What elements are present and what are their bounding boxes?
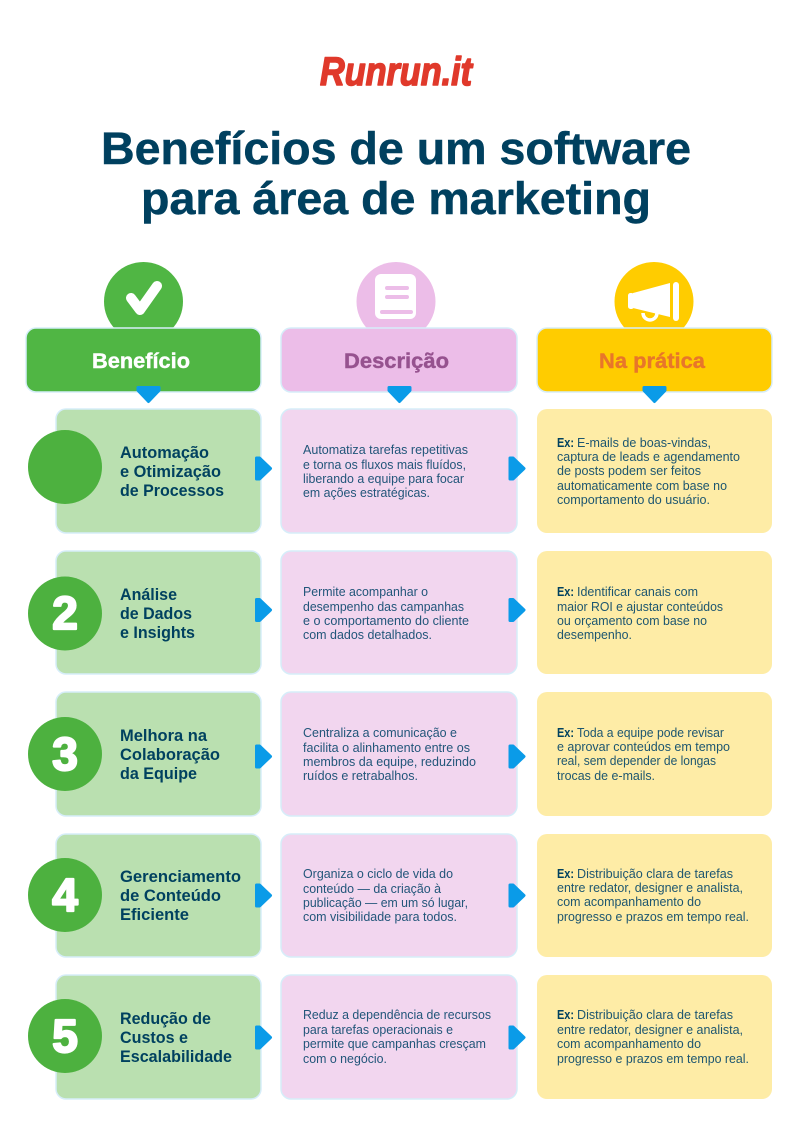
icon: document [356,262,436,341]
panel: example 1: de posts podem ser feitos [557,464,701,478]
column header: Benefício: Benefício [92,350,190,373]
panel: benefit 4: 4 [52,869,78,921]
panel: benefit 3: 3 [52,728,78,780]
panel: benefit 1: Automação [120,444,209,462]
panel: example 5: Distribuição clara de tarefas [577,1008,733,1022]
panel: example 4 [537,834,772,957]
panel: example 2: Identificar canais com [577,585,698,599]
panel: benefit 3: da Equipe [120,765,197,783]
panel: description 5: Reduz a dependência de recursos [303,1008,491,1022]
panel: example 3: trocas de e-mails. [557,769,655,783]
row 4 [28,834,772,957]
arrow: down, column 2 [389,388,410,402]
arrow: down, column 1 [138,388,159,402]
panel: description 4: publicação — em um só lugar, [303,896,468,910]
arrow: right [256,458,270,479]
panel: example 5 [537,975,772,1099]
panel: example 5: progresso e prazos em tempo real. [557,1052,749,1066]
column header: Descrição: Descrição [344,350,449,373]
panel: description 2: desempenho das campanhas [303,600,464,614]
panel: description 3: facilita o alinhamento entre os [303,741,470,755]
panel: example 5: Ex: [557,1008,574,1022]
panel: description 5 [281,975,517,1099]
panel: benefit 3: Melhora na [120,727,208,745]
arrow: right [256,885,270,906]
column header: Na prática: Na prática [599,350,705,373]
panel: description 1: e torna os fluxos mais fluídos, [303,458,466,472]
panel: example 1 [537,409,772,533]
panel: description 5: com o negócio. [303,1052,387,1066]
panel: example 4: com acompanhamento do [557,895,701,909]
panel: benefit 5: Escalabilidade [120,1048,232,1066]
panel: description 2: Permite acompanhar o [303,585,428,599]
arrow: right [256,600,270,620]
arrow: right [510,600,524,620]
column header: Benefício [26,262,261,392]
panel: benefit 5: Custos e [120,1029,188,1047]
panel: example 1: automaticamente com base no [557,479,727,493]
panel: benefit 1 [28,409,261,533]
panel: example 4: Ex: [557,867,574,881]
panel: benefit 4: de Conteúdo [120,887,221,905]
panel: example 4: progresso e prazos em tempo real. [557,910,749,924]
panel: description 4 [281,834,517,957]
panel: description 5: para tarefas operacionais e [303,1023,453,1037]
panel: description 2 [281,551,517,674]
arrow: right [510,885,524,906]
panel: example 4: Distribuição clara de tarefas [577,867,733,881]
panel: example 5: entre redator, designer e analista, [557,1023,743,1037]
panel: description 3: ruídos e retrabalhos. [303,769,418,783]
panel: benefit 5 [28,975,261,1099]
arrow: right [256,746,270,767]
column header: Na prática [537,262,772,392]
title: para área de marketing [141,173,651,224]
panel: benefit 2: Análise [120,586,177,604]
panel: example 2: maior ROI e ajustar conteúdos [557,600,723,614]
panel: description 3 [281,692,517,816]
panel: example 3: real, sem depender de longas [557,754,716,768]
panel: benefit 5: 5 [52,1010,78,1062]
panel: example 3: e aprovar conteúdos em tempo [557,740,730,754]
row 5 [28,975,772,1099]
panel: benefit 2: e Insights [120,624,195,642]
arrow: right [256,1027,270,1048]
icon: check mark [104,262,183,341]
panel: description 3: membros da equipe, reduzindo [303,755,476,769]
panel: benefit 5: Redução de [120,1010,211,1028]
panel: description 1 [281,409,517,533]
panel: example 3: Ex: [557,726,574,740]
panel: description 4: com visibilidade para todos. [303,910,457,924]
panel: example 5: com acompanhamento do [557,1037,701,1051]
panel: example 1: E-mails de boas-vindas, [577,436,711,450]
column header: Descrição [281,262,517,392]
panel: example 2: desempenho. [557,628,632,642]
logo: Runrun.it: Runrun.it [320,50,473,94]
panel: example 2: Ex: [557,585,574,599]
arrow: down, column 3 [644,388,665,402]
panel: description 2: com dados detalhados. [303,628,432,642]
panel: benefit 1: de Processos [120,482,224,500]
panel: example 3 [537,692,772,816]
panel: description 1: Automatiza tarefas repetitivas [303,443,468,457]
panel: example 2: ou orçamento com base no [557,614,707,628]
panel: benefit 1: e Otimização [120,463,221,481]
icon: megaphone [614,262,694,341]
panel: benefit 3: Colaboração [120,746,220,764]
panel: description 3: Centraliza a comunicação e [303,726,457,740]
panel: benefit 2: 2 [52,587,78,639]
panel: description 2: e o comportamento do cliente [303,614,469,628]
panel: example 3: Toda a equipe pode revisar [577,726,724,740]
panel: example 1: Ex: [557,436,574,450]
panel: benefit 3 [28,692,261,816]
panel: description 1: em ações estratégicas. [303,486,430,500]
panel: example 4: entre redator, designer e analista, [557,881,743,895]
panel: example 1: captura de leads e agendamento [557,450,740,464]
panel: benefit 2 [28,551,261,674]
title: Benefícios de um software [101,123,691,174]
panel: example 2 [537,551,772,674]
arrow: right [510,1027,524,1048]
panel: benefit 4: Eficiente [120,906,189,924]
arrow: right [510,746,524,767]
row 3 [28,692,772,816]
arrow: right [510,458,524,479]
panel: benefit 2: de Dados [120,605,192,623]
panel: example 1: comportamento do usuário. [557,493,710,507]
row 1 [28,409,772,533]
panel: description 4: conteúdo — da criação à [303,882,441,896]
row 2 [28,551,772,674]
panel: description 1: liberando a equipe para focar [303,472,464,486]
panel: benefit 4 [28,834,261,957]
title [101,123,691,224]
panel: description 5: permite que campanhas cresçam [303,1037,486,1051]
panel: description 4: Organiza o ciclo de vida do [303,867,453,881]
panel: benefit 4: Gerenciamento [120,868,241,886]
